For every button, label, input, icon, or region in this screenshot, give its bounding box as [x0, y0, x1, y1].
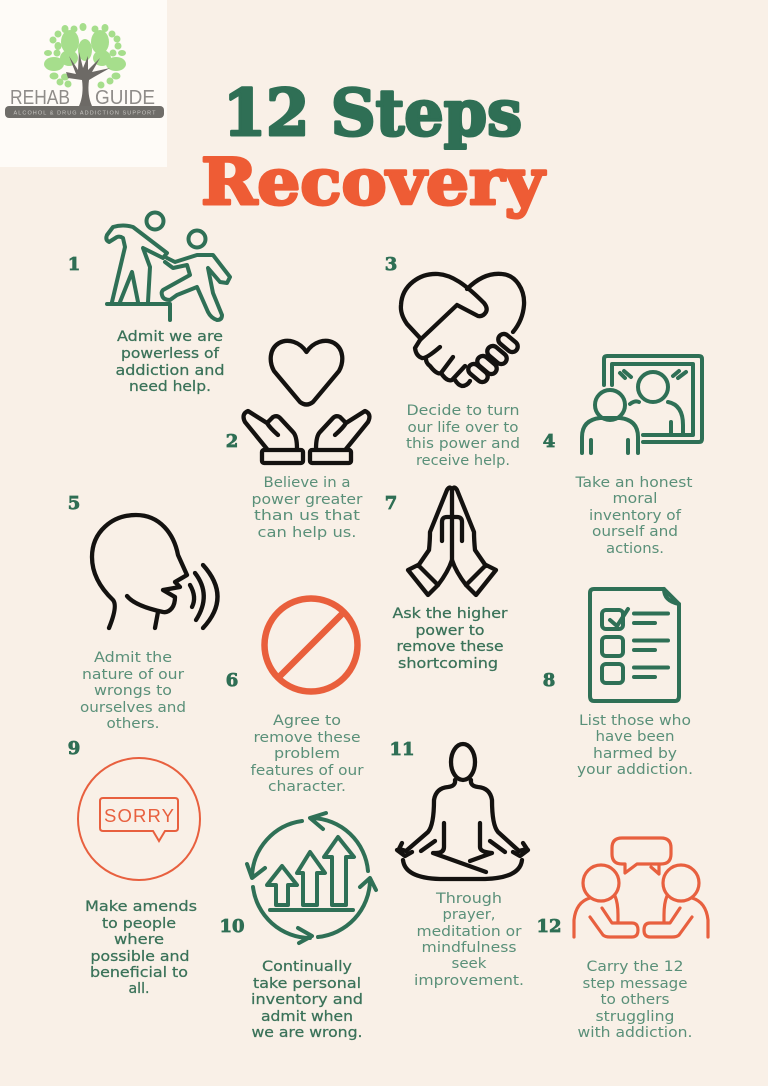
step 3 text: receive help.: [416, 453, 510, 469]
step 8: 8: [543, 670, 555, 691]
step 7: [385, 488, 508, 672]
step 4 text: Take an honest: [574, 475, 693, 491]
step 6 text: [250, 713, 364, 795]
icon: two people talking: [574, 838, 708, 937]
step 1 text: [116, 329, 224, 395]
step 11 text: meditation or: [416, 924, 522, 940]
step 8 text: your addiction.: [577, 762, 693, 778]
step 10 text: we are wrong.: [252, 1025, 362, 1041]
step 4 text: actions.: [606, 541, 664, 557]
step 5 text: others.: [106, 716, 160, 732]
step 6: [226, 598, 364, 795]
step 2: 2: [226, 431, 238, 452]
step 12 text: with addiction.: [578, 1025, 692, 1041]
step 3 text: Decide to turn: [406, 403, 520, 419]
step 6 text: character.: [268, 779, 346, 795]
logo tagline bar: ALCOHOL & DRUG ADDICTION SUPPORT: [14, 110, 156, 116]
logo wordmark: GUIDE: [95, 87, 155, 109]
step 9 text: to people: [102, 916, 176, 932]
step 8 text: List those who: [579, 713, 691, 729]
step 8 text: [577, 713, 693, 778]
step 9 text: beneficial to: [90, 965, 188, 981]
step 10 text: admit when: [261, 1009, 353, 1025]
step 5 text: nature of our: [82, 667, 184, 683]
icon: hands holding heart: [244, 341, 369, 463]
step 1 text: powerless of: [121, 346, 220, 362]
icon: handshake heart: [401, 274, 524, 386]
step 12: [536, 838, 708, 1041]
step 6 text: Agree to: [273, 713, 341, 729]
title: [201, 76, 546, 220]
step 12: 12: [536, 916, 562, 937]
step 9 text: all.: [128, 981, 150, 997]
step 2 text: [252, 475, 363, 541]
step 12 text: struggling: [596, 1009, 674, 1025]
title: Recovery: [201, 145, 546, 220]
step 8: [543, 589, 693, 778]
step 2 text: than us that: [254, 508, 360, 524]
step 3 text: this power and: [406, 436, 520, 452]
step 5 text: Admit the: [94, 650, 172, 666]
step 6 text: problem: [274, 746, 340, 762]
step 4 text: [574, 475, 693, 557]
icon: sorry speech bubble: SORRY: [104, 805, 174, 826]
step 4 text: moral: [612, 491, 658, 507]
step 1: [68, 212, 230, 395]
step 11 text: prayer,: [442, 907, 496, 923]
logo tagline bar: [5, 106, 164, 118]
step 2: [226, 341, 369, 541]
step 6: 6: [226, 670, 238, 691]
step 6 text: features of our: [250, 763, 364, 779]
icon: helping hand: [106, 212, 230, 320]
step 3: 3: [385, 254, 397, 275]
logo wordmark: [10, 87, 155, 109]
title: 12 Steps: [223, 76, 522, 151]
logo: Rehab Guide: [0, 0, 167, 167]
step 9 text: Make amends: [85, 899, 197, 915]
icon: sorry speech bubble: [78, 758, 200, 880]
step 7 text: remove these: [396, 639, 504, 655]
step 6 text: remove these: [254, 730, 361, 746]
step 4 text: ourself and: [592, 524, 678, 540]
step 11: [389, 739, 528, 989]
step 7 text: shortcoming: [398, 656, 498, 672]
step 12 text: [578, 959, 692, 1041]
step 9: 9: [68, 738, 80, 759]
step 9 text: where: [114, 932, 164, 948]
step 11 text: seek: [452, 956, 487, 972]
step 5: [68, 493, 218, 732]
icon: tree: [44, 23, 126, 106]
icon: praying hands: [408, 488, 496, 595]
step 8 text: harmed by: [593, 746, 677, 762]
step 5 text: ourselves and: [80, 700, 186, 716]
step 10: 10: [219, 916, 245, 937]
step 8 text: have been: [596, 729, 674, 745]
step 12 text: to others: [600, 992, 670, 1008]
step 9 text: possible and: [90, 949, 190, 965]
step 12 text: step message: [582, 976, 688, 992]
step 10 text: Continually: [262, 959, 352, 975]
icon: meditating figure: [397, 744, 528, 879]
icon: prohibition sign: [264, 598, 358, 692]
step 11 text: mindfulness: [422, 940, 516, 956]
step 1 text: need help.: [129, 379, 211, 395]
step 7 text: [392, 606, 508, 672]
icon: growth arrows in cycle: [247, 813, 376, 943]
step 11 text: improvement.: [414, 973, 524, 989]
step 2 text: can help us.: [258, 525, 356, 541]
step 9 text: [85, 899, 197, 997]
step 1 text: Admit we are: [117, 329, 223, 345]
step 10 text: take personal: [253, 976, 361, 992]
step 2 text: Believe in a: [264, 475, 350, 491]
icon: checklist: [590, 589, 679, 701]
step 11 text: [414, 891, 524, 989]
step 4: [543, 356, 702, 557]
step 1: 1: [68, 254, 80, 275]
step 1 text: addiction and: [116, 363, 224, 379]
step 3: [385, 254, 524, 469]
step 10 text: [251, 959, 363, 1041]
step 4: 4: [543, 431, 555, 452]
logo wordmark: REHAB: [10, 87, 70, 109]
step 10: [219, 813, 376, 1041]
step 11: 11: [389, 739, 415, 760]
step 7: 7: [385, 493, 397, 514]
step 3 text: our life over to: [408, 420, 519, 436]
step 5 text: wrongs to: [94, 683, 172, 699]
icon: speaking head: [92, 515, 218, 628]
step 10 text: inventory and: [251, 992, 363, 1008]
icon: person at mirror: [582, 356, 702, 453]
step 4 text: inventory of: [589, 508, 682, 524]
step 9: [68, 738, 200, 997]
step 12 text: Carry the 12: [586, 959, 684, 975]
step 11 text: Through: [435, 891, 502, 907]
step 7 text: Ask the higher: [392, 606, 508, 622]
step 2 text: power greater: [252, 492, 363, 508]
step 3 text: [406, 403, 520, 469]
step 5 text: [80, 650, 186, 732]
step 5: 5: [68, 493, 80, 514]
step 7 text: power to: [416, 623, 485, 639]
